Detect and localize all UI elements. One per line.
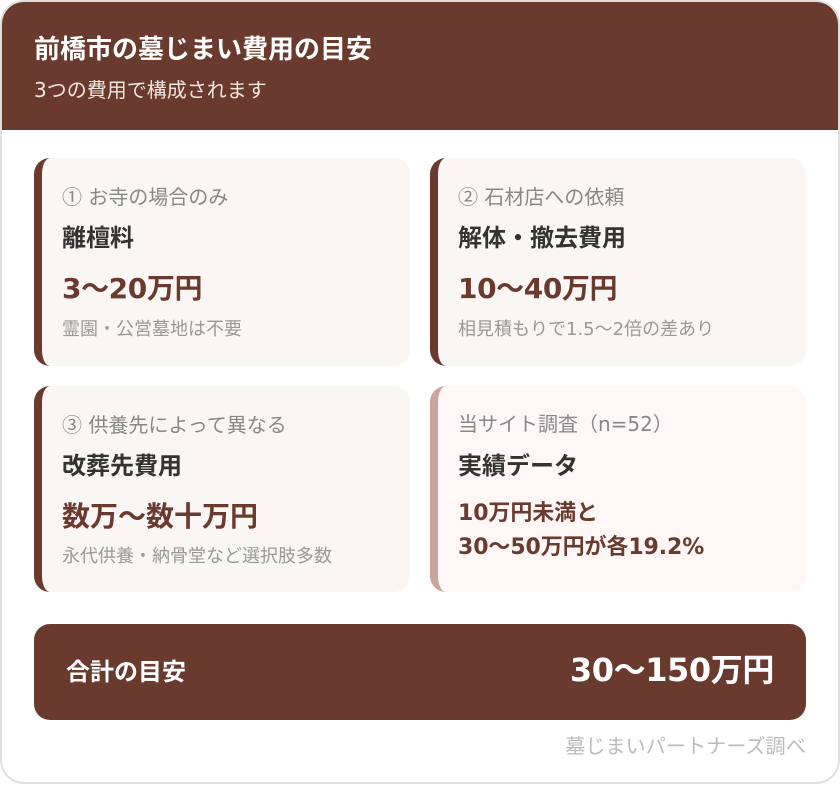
panel: reburial fee: [34, 386, 410, 592]
label: ① お寺の場合のみ: [62, 181, 228, 210]
name: 離檀料: [62, 224, 134, 252]
amount: 数万〜数十万円: [62, 500, 258, 533]
panel: temple fee: [34, 158, 410, 366]
total amount: 30〜150万円: [570, 651, 774, 689]
source: 墓じまいパートナーズ調べ: [565, 734, 806, 758]
result text: [458, 500, 704, 560]
title: 前橋市の墓じまい費用の目安: [34, 35, 372, 65]
total label: 合計の目安: [66, 658, 186, 686]
amount: 3〜20万円: [62, 272, 202, 305]
panel: demolition fee: [430, 158, 806, 366]
note: 永代供養・納骨堂など選択肢多数: [62, 546, 332, 567]
note: 相見積もりで1.5〜2倍の差あり: [458, 319, 714, 340]
label: ② 石材店への依頼: [458, 181, 624, 210]
header band: [2, 2, 838, 130]
subtitle: 3つの費用で構成されます: [34, 78, 267, 102]
label: ③ 供養先によって異なる: [62, 409, 287, 438]
result text: 10万円未満と: [458, 501, 598, 526]
total bar: [34, 624, 806, 720]
name: 改葬先費用: [62, 452, 182, 480]
result text: 30〜50万円が各19.2%: [458, 535, 704, 560]
name: 実績データ: [458, 452, 578, 480]
panel: survey data: [430, 386, 806, 592]
amount: 10〜40万円: [458, 272, 617, 305]
label: 当サイト調査（n=52）: [458, 412, 673, 436]
name: 解体・撤去費用: [458, 224, 626, 252]
note: 霊園・公営墓地は不要: [62, 319, 242, 340]
